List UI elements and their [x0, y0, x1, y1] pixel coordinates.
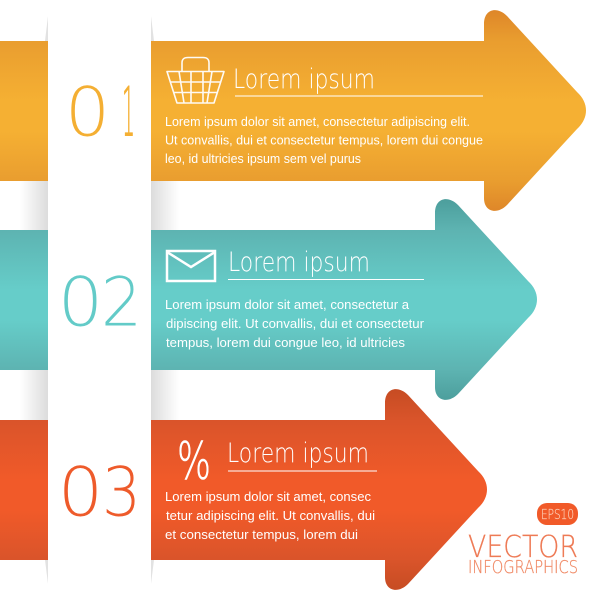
heading 2: Lorem ipsum: [228, 247, 370, 278]
number 02: 2: [101, 264, 142, 342]
heading 2 underline: [228, 279, 424, 280]
title: vector infographics: VECTOR: [468, 530, 578, 565]
band shadows: [20, 16, 179, 584]
badge: EPS10: [537, 503, 578, 525]
heading 3 underline: [228, 470, 377, 472]
icon: envelope: [167, 251, 215, 281]
text block 2: [165, 297, 425, 350]
arrow 2: teal: [0, 199, 537, 400]
number 01: [65, 74, 135, 152]
text block 3: [165, 489, 375, 542]
text block 1: [165, 114, 483, 166]
text block 3: tetur adipiscing elit. Ut convallis, dui: [166, 508, 375, 523]
title: vector infographics: INFOGRAPHICS: [468, 557, 578, 578]
number 03: [58, 454, 141, 532]
icon: percent: %: [177, 432, 211, 492]
text: 1: [122, 74, 135, 152]
text block 1: Lorem ipsum dolor sit amet, consectetur adipiscing elit.: [165, 114, 470, 129]
text block 2: dipiscing elit. Ut convallis, dui et consectetur: [166, 316, 425, 331]
text block 2: tempus, lorem dui congue leo, id ultricies: [166, 335, 405, 350]
heading 1: Lorem ipsum: [233, 64, 375, 95]
number 03: 0: [58, 454, 103, 532]
text block 1: leo, id ultricies ipsum sem vel purus: [165, 151, 361, 166]
icon: shopping basket: [167, 58, 224, 103]
text block 2: Lorem ipsum dolor sit amet, consectetur a: [165, 297, 410, 312]
vertical white band: [48, 16, 151, 584]
text block 3: Lorem ipsum dolor sit amet, consec: [165, 489, 372, 504]
text block 1: Ut convallis, dui et consectetur tempus, lorem dui congue: [165, 132, 483, 148]
heading 1 underline: [235, 96, 483, 97]
badge: EPS10: EPS10: [541, 507, 574, 523]
arrow 1: orange: [0, 10, 586, 211]
text block 3: et consectetur tempus, lorem dui: [165, 527, 358, 542]
title: vector infographics: [468, 530, 578, 578]
number 02: 0: [58, 264, 103, 342]
arrow 3: red: [0, 389, 487, 590]
number 01: 0: [65, 74, 110, 152]
number 03: 3: [102, 454, 141, 532]
heading 3: Lorem ipsum: [227, 438, 369, 469]
number 02: [58, 264, 142, 342]
